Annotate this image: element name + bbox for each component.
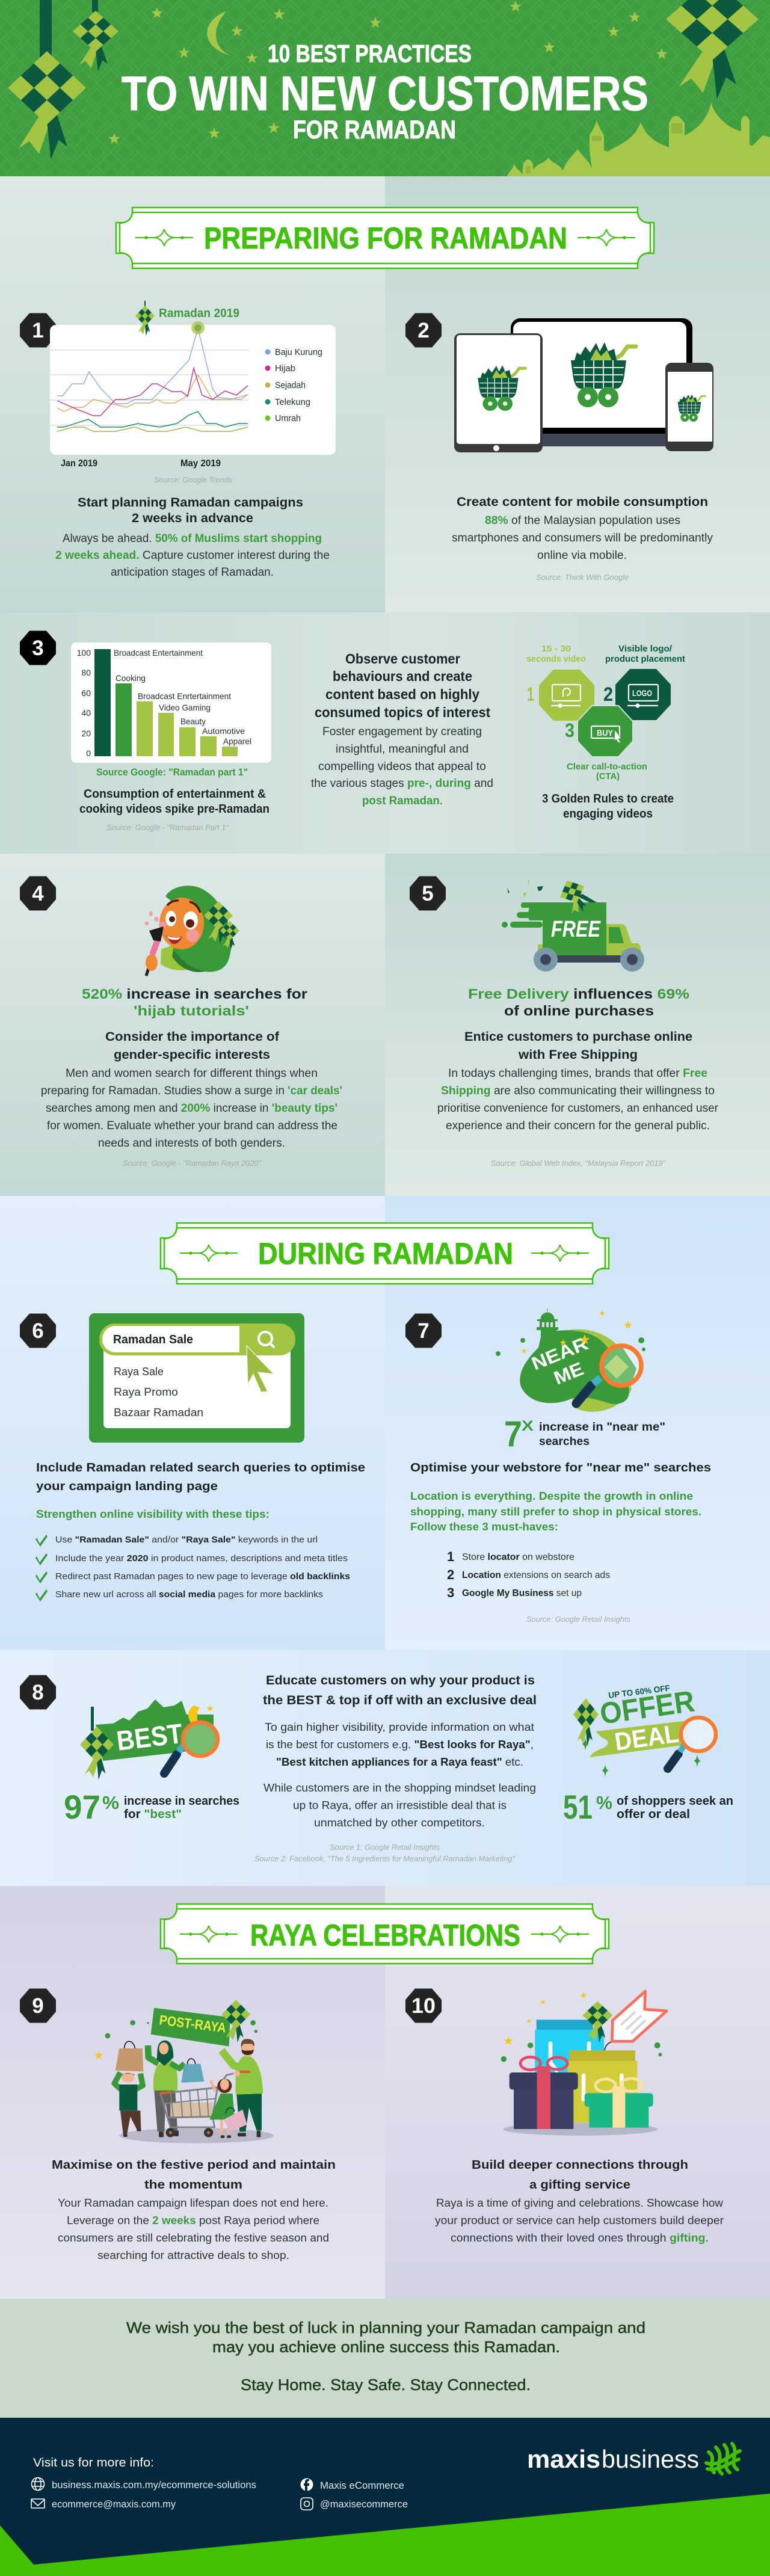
text block: tip 3 centre: content based on highly [325,686,479,702]
mother [148,2041,204,2131]
text block: tip 3 centre: consumed topics of interest [315,704,490,720]
text block: tip 4: 520% increase in searches for [82,986,307,1002]
panel: closing message [0,2299,770,2418]
stat: 51%: % [596,1792,612,1813]
panel: closing message: We wish you the best of luck in planning your Ramadan campaign and [126,2319,645,2337]
label: Ramadan 2019: Ramadan 2019 [159,307,239,320]
title: TO WIN NEW CUSTOMERS [122,67,648,121]
diagram: 3 golden rules: 2 [603,683,613,705]
diagram: 3 golden rules: 3 [565,719,574,741]
legend: Baju Kurung [275,347,322,357]
text block: tip 8: Educate customers on why your product is [266,1674,535,1687]
checklist [35,1535,350,1601]
badge 2: 2 [417,319,430,342]
diagram: 3 golden rules: Clear call-to-action [567,762,647,772]
illustration: gifts and shopping bags [501,1991,667,2136]
text block: tip 7: Optimise your webstore for "near me" searches [410,1461,711,1474]
numbered list: Location extensions on search ads [462,1570,610,1580]
text block: tip 3 centre: Foster engagement by creating [322,726,482,738]
text block: tip 7: Location is everything. Despite the growth in online [410,1490,693,1502]
text block: tip 3 centre: Observe customer [345,651,460,667]
legend: Hijab [275,363,295,374]
peak marker [191,321,205,334]
badge 9 [20,1989,56,2023]
panel: closing message: Stay Home. Stay Safe. Stay Connected. [241,2376,531,2394]
diagram: 3 golden rules: Visible logo/ [618,644,673,654]
heading: preparing for Ramadan: PREPARING FOR RAMADAN [204,221,567,255]
line chart: Google Trends [50,321,336,469]
bar chart: video consumption: 40 [81,708,91,718]
text block: tip 5: of online purchases [504,1003,654,1018]
numbered list [447,1549,630,1624]
text block: tip 8: "Best kitchen appliances for a Raya feast" etc. [276,1756,523,1768]
text block: tip 5: Entice customers to purchase online [464,1030,692,1044]
badge 3: 3 [32,636,44,660]
panel: closing message: may you achieve online success this Ramadan. [212,2338,560,2356]
text block: tip 3 centre: behaviours and create [333,668,472,684]
text block: tip 5: Free Delivery influences 69% [468,986,689,1002]
illustration: search box [89,1313,304,1443]
stat: 7x: X [522,1418,534,1434]
diagram: 3 golden rules: (CTA) [596,771,620,781]
text block: tip 1 [55,496,330,579]
badge 4: 4 [32,882,44,905]
icon: instagram [301,2498,313,2510]
logo: maxis business: business [602,2445,699,2473]
chart caption and text: Source Google: "Ramadan part 1" [96,766,248,778]
kid [114,2041,143,2136]
badge 3 [20,630,56,665]
illustration: near me: ME [551,1358,587,1388]
stat: 51%: offer or deal [617,1808,690,1821]
text block: tip 2: Source: Think With Google [536,573,629,582]
illustration: offer deal: DEAL [613,1719,680,1756]
diagram: 3 golden rules [526,644,685,821]
chart caption and text [79,766,270,832]
chart caption and text: cooking videos spike pre-Ramadan [79,803,270,816]
link: facebook: Maxis eCommerce [320,2480,404,2491]
bar chart: video consumption: Broadcast Enrtertainment [138,691,231,701]
text block: tip 8: unmatched by other competitors. [314,1817,485,1829]
diagram: 3 golden rules: 1 [527,683,534,705]
logo: maxis business: maxis [527,2445,600,2473]
heading: Raya celebrations: RAYA CELEBRATIONS [250,1918,520,1952]
icon: globe [31,2477,45,2491]
text block: tip 1: Always be ahead. 50% of Muslims start shopping [63,532,322,545]
icon: small ketupat left [73,0,119,71]
stat: 97%: for "best" [124,1808,182,1821]
link: email: ecommerce@maxis.com.my [52,2498,176,2510]
icon: stars [108,1,668,144]
diagram: 3 golden rules: seconds video [526,654,586,664]
source: Source: Google Trends [154,475,232,484]
illustration: search box: Raya Sale [114,1366,164,1378]
panel: tip 9 background [0,1886,385,2299]
text block: tip 8: the BEST & top if off with an exclusive deal [263,1693,537,1707]
text block: tip 8: Source 1: Google Retail Insights [330,1843,440,1852]
text block: tip 4: Consider the importance of [105,1030,280,1044]
label: Ramadan 2019 [135,301,239,336]
panel: tip 6 background [0,1196,385,1650]
legend: Sejadah [275,380,306,390]
stat: 97%: % [102,1792,119,1813]
tip 10 [405,1989,724,2244]
text block: tip 8: is the best for customers e.g. "Best looks for Raya" , [266,1739,534,1751]
axis labels: May 2019 [180,458,221,469]
icon: large ketupat left [8,0,86,159]
text block: tip 1: 2 weeks ahead. Capture customer interest during the [55,549,330,562]
text block: tip 10 [435,2158,724,2244]
tip 6 [20,1313,365,1601]
text block: tip 1: anticipation stages of Ramadan. [111,566,274,579]
illustration: offer deal: OFFER [598,1684,697,1731]
illustration: mosque silhouette [507,102,770,176]
badge 5: 5 [422,882,434,905]
text block: tip 5: with Free Shipping [518,1048,638,1062]
tip 1 [20,301,336,579]
text block: tip 10: your product or service can help customers build deeper [435,2214,724,2226]
heading: Raya celebrations [161,1904,609,1964]
bar chart: video consumption: Automotive [202,726,245,736]
text block: tip 2: online via mobile. [537,549,627,562]
bar chart: video consumption: 20 [81,729,91,738]
heading: preparing for Ramadan [116,208,654,268]
text block: tip 9: consumers are still celebrating the festive season and [58,2232,329,2244]
icon: mail [31,2499,45,2508]
text block: tip 1: 2 weeks in advance [132,511,253,525]
text block: tip 3 centre: the various stages pre-, during and [311,777,493,790]
text block: tip 3 centre [311,651,493,807]
panel: tip 5 [385,854,770,1196]
illustration: search box: Bazaar Ramadan [114,1407,203,1419]
bar chart: video consumption: 80 [81,668,91,677]
panel: tip 1 background [0,176,385,612]
text block: tip 10: a gifting service [529,2178,630,2192]
bar chart: video consumption: Video Gaming [159,703,211,712]
icon: facebook [301,2479,313,2491]
illustration: family shopping post-Raya: POST-RAYA [158,2012,227,2036]
shopping cart [160,2074,233,2137]
text block: tip 9: searching for attractive deals to shop. [97,2249,289,2261]
diagram: 3 golden rules: engaging videos [563,807,653,821]
bar chart: video consumption: 60 [81,688,91,698]
diagram: 3 golden rules: 3 Golden Rules to create [542,792,674,806]
heading: during Ramadan [161,1223,609,1284]
text block: tip 7 [410,1461,711,1533]
text block: tip 1: Start planning Ramadan campaigns [78,496,303,510]
panel: tip 2 background [385,176,770,612]
badge 2 [405,313,442,348]
badge 6: 6 [32,1319,44,1343]
text block: tip 7: shopping, many still prefer to shop in physical stores. [410,1506,701,1518]
father [221,2039,263,2131]
text block: tip 2: 88% of the Malaysian population uses [485,514,680,527]
title [122,40,648,144]
panel: tip 3 [0,612,770,854]
text block: tip 4: searches among men and 200% increase in 'beauty tips' [46,1102,337,1115]
legend: Umrah [275,413,301,424]
bar chart: video consumption: Apparel [223,736,251,746]
text block: tip 9: Leverage on the 2 weeks post Raya period where [67,2214,319,2226]
diagram: 3 golden rules: BUY [597,728,614,738]
text block: tip 6 [36,1461,365,1520]
text block: tip 5: Shipping are also communicating their willingness to [441,1085,715,1097]
bar chart: video consumption: 100 [77,648,91,658]
text block: tip 3 centre: compelling videos that appeal to [318,760,486,773]
stat: 7x: searches [539,1435,590,1448]
panel: tip 4 [0,854,385,1196]
text block: tip 3 centre: insightful, meaningful and [336,743,469,756]
text block: tip 8 [254,1674,537,1863]
checklist: Include the year 2020 in product names, descriptions and meta titles [55,1553,348,1564]
badge 7 [405,1314,442,1348]
text block: tip 10: Raya is a time of giving and celebrations. Showcase how [436,2197,724,2209]
text block: tip 8: up to Raya, offer an irresistible deal that is [293,1799,507,1811]
footer [0,2418,770,2576]
badge 1: 1 [32,319,44,342]
text block: tip 4: Men and women search for different things when [66,1067,318,1080]
legend [265,347,322,424]
bar chart: video consumption [71,642,271,763]
badge 8: 8 [32,1681,44,1704]
axis labels [61,458,221,469]
panel: tip 7 background [385,1196,770,1650]
checklist: Redirect past Ramadan pages to new page to leverage old backlinks [55,1571,350,1582]
tip 7 [405,1308,711,1624]
illustration: best: BEST [115,1718,184,1757]
text block: tip 2: Create content for mobile consumption [457,495,708,509]
text block: tip 6: Include Ramadan related search queries to optimise [36,1461,365,1474]
stat: 7x [504,1414,665,1454]
badge 9: 9 [32,1994,44,2018]
title: FOR RAMADAN [293,116,456,144]
numbered list: 2 [447,1567,454,1582]
badge 10: 10 [411,1994,436,2018]
text: visit us: Visit us for more info: [33,2456,154,2470]
text block: tip 4: needs and interests of both genders. [98,1137,285,1150]
panel: tip 8 [0,1650,770,1886]
badge 10 [405,1989,442,2023]
text block: tip 2 [452,495,713,582]
numbered list: Store locator on webstore [462,1552,574,1562]
bar chart: video consumption: 0 [86,748,91,758]
text block: tip 5: Source: Global Web Index, "Malaysia Report 2019" [491,1159,666,1168]
icon: laptop, tablet and phone with carts [454,318,713,452]
illustration: search box: Raya Promo [114,1386,178,1398]
text block: tip 6: Strengthen online visibility with these tips: [36,1508,270,1520]
numbered list: 3 [447,1585,454,1600]
icon: free delivery truck: FREE [551,917,601,942]
numbered list: 1 [447,1549,454,1564]
text block: tip 10: connections with their loved ones through gifting . [451,2232,709,2244]
numbered list: Google My Business set up [462,1588,582,1598]
axis labels: Jan 2019 [61,458,97,469]
illustration: offer deal: UP TO 60% OFF [608,1683,671,1700]
text block: tip 10: Build deeper connections through [472,2158,688,2172]
illustration: near me [496,1308,645,1412]
chart caption and text: Consumption of entertainment & [84,787,266,801]
checklist: Use "Ramadan Sale" and/or "Raya Sale" keywords in the url [55,1535,318,1545]
tip 9 [20,1989,336,2261]
text block: tip 8: Source 2: Facebook, "The 5 Ingredients for Meaningful Ramadan Marketing" [254,1854,516,1863]
stat: 97%: increase in searches [124,1795,239,1808]
text block: tip 5: experience and their concern for the general public. [446,1120,710,1132]
stat: 97% [64,1788,239,1826]
text block: tip 9: Your Ramadan campaign lifespan does not end here. [58,2197,328,2209]
text block: tip 4: preparing for Ramadan. Studies show a surge in 'car deals' [41,1085,342,1097]
bar chart: video consumption: Cooking [116,673,146,683]
chart caption and text: Source: Google - "Ramadan Part 1" [106,823,229,832]
illustration: search box: Ramadan Sale [113,1333,193,1346]
illustration: near me: NEAR [529,1333,591,1374]
header banner [0,0,770,176]
text block: tip 5: In todays challenging times, brands that offer Free [448,1067,707,1080]
icon: large ketupat right [666,0,759,99]
illustration: best [80,1699,218,1779]
stat: 51% [563,1788,733,1826]
diagram: 3 golden rules: LOGO [632,688,652,698]
badge 5 [410,876,446,911]
text block: tip 2: smartphones and consumers will be predominantly [452,532,713,544]
text block: tip 9 [52,2158,336,2261]
heading: during Ramadan: DURING RAMADAN [258,1237,513,1271]
text block: tip 4: 'hijab tutorials' [134,1003,249,1018]
panel: tip 10 background [385,1886,770,2299]
diagram: 3 golden rules: 15 - 30 [541,644,571,654]
stat: 7x: increase in "near me" [539,1421,665,1434]
logo: maxis business [527,2444,740,2474]
text block: tip 4: gender-specific interests [114,1048,270,1062]
text block: tip 4: Source: Google - "Ramadan Raya 2020" [123,1159,262,1168]
text block: tip 5 [437,986,719,1168]
bar chart: video consumption: Broadcast Entertainment [114,648,203,658]
icon: woman in hijab applying make-up [144,886,239,976]
illustration: family shopping post-Raya [94,2000,274,2143]
numbered list: Source: Google Retail Insights [526,1615,630,1624]
text block: tip 4: for women. Evaluate whether your brand can address the [47,1120,337,1132]
badge 8 [20,1675,56,1710]
bar chart: video consumption: Beauty [180,716,206,726]
text block: tip 9: Maximise on the festive period and maintain [52,2158,336,2172]
stat: 7x: 7 [504,1414,522,1454]
tip 2 [405,313,713,582]
illustration: offer deal [573,1683,716,1777]
text block: tip 5: prioritise convenience for customers, an enhanced user [437,1102,719,1115]
text block: tip 9: the momentum [144,2178,242,2192]
stat: 51%: 51 [563,1788,593,1826]
badge 1 [20,313,56,348]
icon: free delivery truck [502,875,644,972]
text block: tip 8: To gain higher visibility, provide information on what [265,1721,534,1733]
text block: tip 8: While customers are in the shopping mindset leading [263,1782,536,1794]
text block: tip 6: your campaign landing page [36,1480,218,1493]
shoes [123,2129,260,2138]
link: website: business.maxis.com.my/ecommerce-solutions [52,2479,256,2491]
text block: tip 4 [41,986,342,1168]
stat: 97%: 97 [64,1788,100,1826]
badge 7: 7 [417,1319,430,1343]
diagram: 3 golden rules: product placement [605,654,685,664]
badge 6 [20,1314,56,1348]
checklist: Share new url across all social media pages for more backlinks [55,1589,323,1600]
text block: tip 3 centre: post Ramadan. [362,795,443,807]
text block: tip 7: Follow these 3 must-haves: [410,1521,558,1533]
legend: Telekung [275,397,310,407]
girl [209,2078,247,2136]
title: 10 BEST PRACTICES [268,40,472,67]
stat: 51%: of shoppers seek an [617,1795,733,1808]
link: instagram: @maxisecommerce [320,2498,408,2510]
badge 4 [20,876,56,911]
icon: crescent moon [207,11,236,57]
